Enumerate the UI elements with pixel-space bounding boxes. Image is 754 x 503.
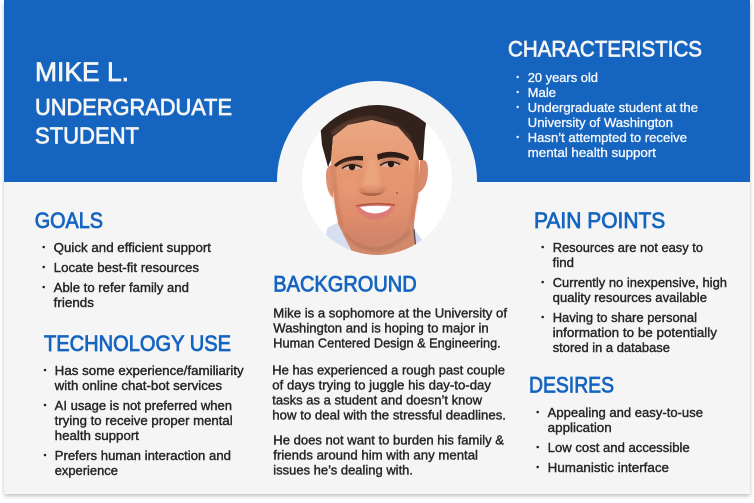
title: name and role: STUDENT bbox=[35, 122, 139, 148]
list: technology use: Prefers human interaction and bbox=[55, 448, 231, 463]
nose bbox=[363, 161, 380, 186]
eyebrows bbox=[334, 156, 363, 167]
paragraph: stress: tasks as a student and doesn’t know bbox=[272, 393, 483, 408]
list: technology use: health support bbox=[55, 428, 139, 443]
heading: goals: GOALS bbox=[35, 208, 103, 233]
title: name and role: MIKE L. bbox=[35, 57, 129, 87]
list: characteristics bbox=[516, 70, 698, 160]
list: characteristics: mental health support bbox=[528, 145, 656, 160]
beauty mark bbox=[396, 192, 398, 194]
paragraph: family: He does not want to burden his family & bbox=[273, 433, 504, 448]
panel: blue header bbox=[4, 0, 750, 182]
list: technology use: Has some experience/familiarity bbox=[55, 363, 244, 378]
panel: background bbox=[272, 272, 507, 478]
paragraph: stress: how to deal with the stressful deadlines. bbox=[272, 408, 506, 423]
list: goals bbox=[42, 240, 211, 310]
list: characteristics: 20 years old bbox=[528, 70, 598, 85]
hair bbox=[320, 105, 426, 167]
list: technology use: experience bbox=[55, 463, 118, 478]
heading: pain points: PAIN POINTS bbox=[534, 208, 665, 233]
list: pain points: information to be potentially bbox=[553, 325, 718, 340]
ears bbox=[326, 165, 333, 198]
list: technology use: with online chat-bot services bbox=[54, 378, 222, 393]
paragraph: family: issues he’s dealing with. bbox=[273, 463, 413, 478]
neck bbox=[337, 208, 416, 255]
list: desires: application bbox=[548, 420, 612, 435]
portrait ring bbox=[277, 81, 477, 281]
heading: technology use: TECHNOLOGY USE bbox=[44, 331, 231, 356]
list: pain points bbox=[541, 240, 727, 355]
list: pain points: find bbox=[553, 255, 574, 270]
list: goals: Able to refer family and bbox=[54, 280, 189, 295]
list: characteristics: University of Washington bbox=[528, 115, 673, 130]
shirt bbox=[326, 223, 350, 250]
paragraph: stress: of days trying to juggle his day-to-day bbox=[272, 378, 492, 393]
list: desires bbox=[536, 405, 703, 475]
list: characteristics: Male bbox=[528, 85, 556, 100]
paragraph: major bbox=[273, 306, 507, 351]
list: pain points: Having to share personal bbox=[553, 310, 697, 325]
paragraph: stress: He has experienced a rough past couple bbox=[272, 363, 505, 378]
paragraph: stress bbox=[272, 363, 506, 423]
list: goals: Locate best-fit resources bbox=[54, 260, 199, 275]
list: pain points: Resources are not easy to bbox=[553, 240, 703, 255]
list: technology use: trying to receive proper mental bbox=[55, 413, 233, 428]
list: desires: Appealing and easy-to-use bbox=[548, 405, 703, 420]
panel: goals bbox=[35, 208, 211, 310]
panel: technology use bbox=[44, 331, 244, 478]
eye sockets bbox=[341, 161, 363, 169]
list: desires: Low cost and accessible bbox=[548, 440, 690, 455]
heading: desires: DESIRES bbox=[529, 373, 614, 398]
paragraph: family bbox=[273, 433, 504, 478]
list: pain points: stored in a database bbox=[553, 340, 670, 355]
list: goals: Quick and efficient support bbox=[54, 240, 211, 255]
title: name and role bbox=[35, 57, 232, 148]
list: technology use: AI usage is not preferred when bbox=[55, 398, 232, 413]
panel: pain points bbox=[534, 208, 727, 355]
list: desires: Humanistic interface bbox=[548, 460, 669, 475]
title: name and role: UNDERGRADUATE bbox=[35, 94, 232, 120]
portrait: photo of Mike bbox=[302, 100, 452, 262]
panel: desires bbox=[529, 373, 703, 475]
list: pain points: quality resources available bbox=[553, 290, 707, 305]
face shading bbox=[331, 165, 344, 228]
list: goals: friends bbox=[54, 295, 95, 310]
list: pain points: Currently no inexpensive, high bbox=[553, 275, 727, 290]
mouth bbox=[356, 204, 395, 220]
face bbox=[331, 120, 419, 245]
paragraph: major: Human Centered Design & Engineering. bbox=[273, 336, 501, 351]
panel: characteristics bbox=[508, 37, 702, 160]
heading: characteristics: CHARACTERISTICS bbox=[508, 37, 702, 62]
list: technology use bbox=[44, 363, 244, 478]
eyes bbox=[342, 165, 362, 170]
list: characteristics: Undergraduate student at the bbox=[528, 100, 698, 115]
paragraph: major: Washington and is hoping to major in bbox=[273, 321, 489, 336]
heading: background: BACKGROUND bbox=[273, 272, 417, 297]
paragraph: major: Mike is a sophomore at the University of bbox=[273, 306, 507, 321]
paragraph: family: friends around him with any mental bbox=[273, 448, 478, 463]
list: characteristics: Hasn’t attempted to receive bbox=[528, 130, 687, 145]
